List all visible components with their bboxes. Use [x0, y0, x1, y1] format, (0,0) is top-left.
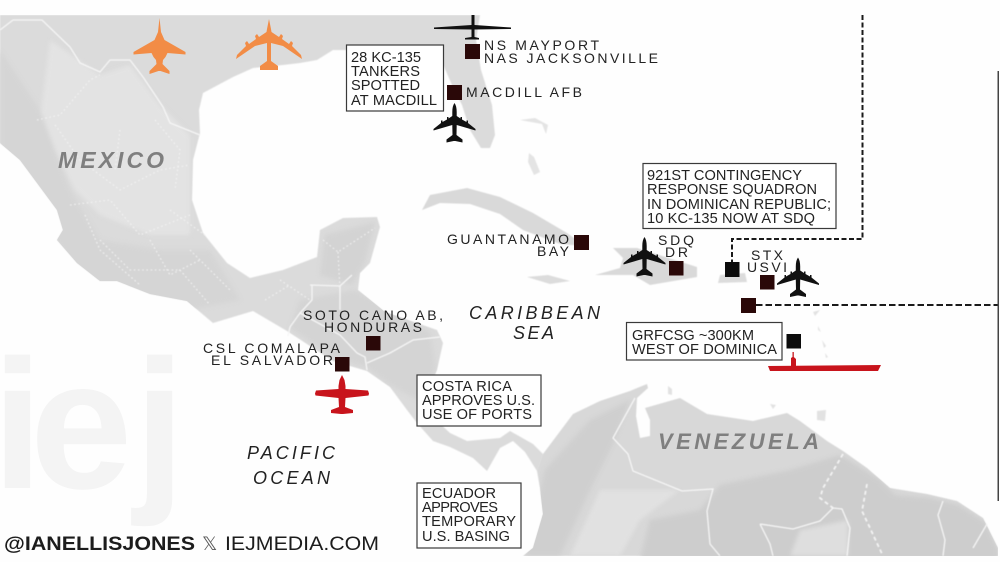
label: Caribbean Sea [469, 303, 601, 343]
marker and label: NS Mayport, NAS Jacksonville [465, 37, 658, 66]
icon: black tanker at USVI [777, 258, 819, 297]
callout: 921st Contingency Response Squadron: 921ST CONTINGENCY [647, 168, 802, 184]
footer credit: IEJMEDIA.COM [225, 533, 379, 555]
marker and label: Guantanamo Bay: GUANTANAMO [447, 231, 569, 247]
icon: red transport aircraft [315, 375, 369, 414]
marker and label: SDQ DR: SDQ [658, 232, 694, 248]
label: Pacific Ocean: PACIFIC [247, 443, 336, 463]
marker and label: SDQ DR: DR [665, 244, 688, 260]
callout: 28 KC-135 tankers: 28 KC-135 [351, 50, 421, 66]
footer credit [4, 533, 379, 555]
marker and label: NS Mayport, NAS Jacksonville: NAS JACKSONVILLE [484, 50, 658, 66]
dashed connector: top to Puerto Rico [732, 15, 862, 262]
callout: Costa Rica: USE OF PORTS [422, 407, 532, 423]
land shading: North America [0, 47, 412, 322]
marker: dashed line origin [741, 298, 756, 313]
callout: Ecuador: ECUADOR [422, 486, 496, 502]
land: North America and Central America [0, 15, 543, 471]
callout: Costa Rica [417, 375, 541, 426]
marker: Dominica [786, 334, 801, 348]
label: Pacific Ocean: OCEAN [253, 468, 331, 488]
callout: Ecuador: APPROVES [422, 500, 498, 516]
callout: GRFCSG [626, 322, 782, 360]
icon: black tanker at SDQ [624, 237, 666, 276]
callout: 28 KC-135 tankers: SPOTTED [351, 78, 420, 94]
icon: black aircraft top [434, 15, 511, 40]
callout: Costa Rica: APPROVES U.S. [422, 393, 535, 409]
islands: Cuba, Jamaica, Hispaniola, Puerto Rico, Bahamas, Antilles [422, 188, 585, 246]
country label: Mexico: MEXICO [58, 147, 164, 173]
marker and label: STX USVI: STX [751, 247, 784, 263]
marker and label: CSL Comalapa, El Salvador: CSL COMALAPA [203, 340, 341, 356]
marker and label: Guantanamo Bay [447, 231, 589, 259]
icon: orange bomber right [236, 19, 302, 70]
marker and label: CSL Comalapa, El Salvador [203, 340, 350, 372]
callout: 921st Contingency Response Squadron [643, 164, 836, 228]
callout: 28 KC-135 tankers: TANKERS [351, 64, 420, 80]
label: Caribbean Sea: CARIBBEAN [469, 303, 601, 323]
right edge rule [998, 71, 999, 501]
callout: GRFCSG: GRFCSG ~300KM [632, 328, 754, 344]
marker and label: STX USVI [747, 247, 787, 290]
marker: Puerto Rico [725, 262, 740, 277]
land: South America [523, 384, 998, 556]
callout: Ecuador [417, 483, 521, 548]
country label: Venezuela: VENEZUELA [658, 429, 819, 454]
callout: Ecuador: TEMPORARY [422, 514, 516, 530]
marker and label: MacDill AFB: MACDILL AFB [466, 84, 582, 100]
callout: Ecuador: U.S. BASING [422, 529, 510, 545]
footer credit: @IANELLISJONES [4, 533, 195, 555]
icon: orange bomber left [134, 18, 186, 74]
label: Caribbean Sea: SEA [513, 323, 554, 343]
land shading: South America [525, 400, 998, 560]
marker and label: Soto Cano AB, Honduras: SOTO CANO AB, [303, 307, 443, 323]
callout: 28 KC-135 tankers: AT MACDILL [351, 93, 437, 109]
icon: black tanker at MacDill [434, 103, 476, 142]
callout: 921st Contingency Response Squadron: 10 KC-135 NOW AT SDQ [647, 211, 815, 227]
marker and label: STX USVI: USVI [747, 259, 787, 275]
label: Pacific Ocean [247, 443, 336, 488]
marker and label: Guantanamo Bay: BAY [537, 243, 570, 259]
callout: 921st Contingency Response Squadron: RESPONSE SQUADRON [647, 182, 817, 198]
footer credit: 𝕏 [202, 533, 217, 555]
icon: red aircraft carrier [768, 352, 881, 371]
marker and label: NS Mayport, NAS Jacksonville: NS MAYPORT [484, 37, 599, 53]
callout: 921st Contingency Response Squadron: IN DOMINICAN REPUBLIC; [647, 197, 831, 213]
marker and label: Soto Cano AB, Honduras [303, 307, 443, 350]
callout: Costa Rica: COSTA RICA [422, 379, 512, 395]
marker and label: SDQ DR [658, 232, 694, 276]
dashed connector: marker to right edge [756, 304, 998, 306]
callout: 28 KC-135 tankers [346, 45, 444, 111]
callout: GRFCSG: WEST OF DOMINICA [632, 342, 777, 358]
marker and label: Soto Cano AB, Honduras: HONDURAS [324, 319, 422, 335]
marker and label: CSL Comalapa, El Salvador: EL SALVADOR [211, 352, 333, 368]
